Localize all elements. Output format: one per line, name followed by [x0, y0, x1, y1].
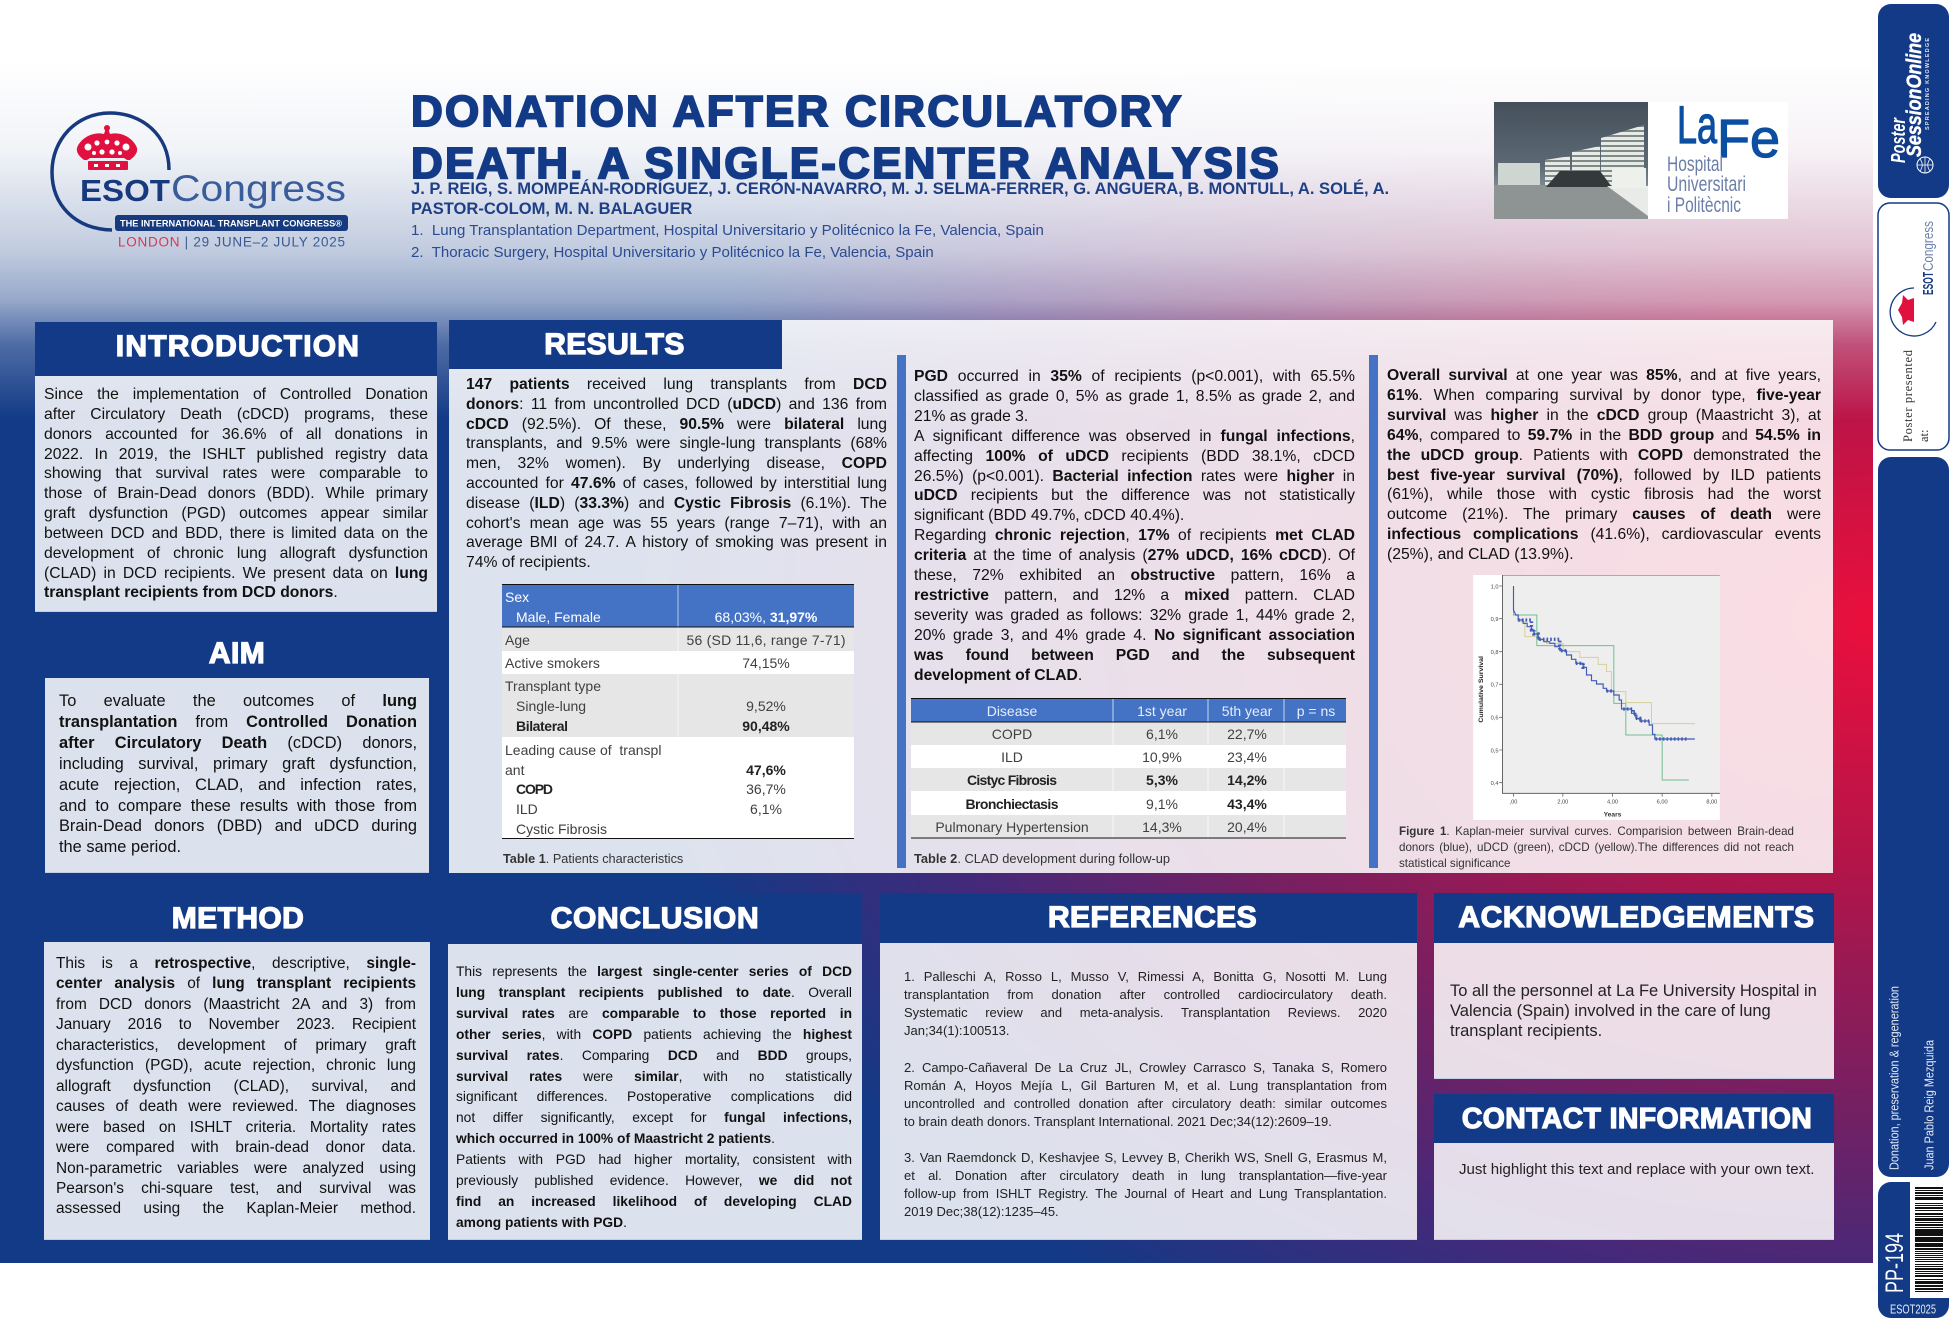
results column 2 text: was found between PGD and the subsequent	[914, 647, 1355, 664]
aim text: the same period.	[59, 838, 181, 856]
table 2 caption: Table 2. CLAD development during follow-up	[914, 851, 1170, 866]
heading: results: RESULTS	[544, 328, 685, 361]
table 1: patient characteristics: Sex	[505, 589, 529, 605]
divider bar right	[1369, 355, 1378, 868]
reference 3	[904, 1150, 1387, 1219]
results column 2 text: PGD occurred in 35% of recipients (p<0.001), with 65.5%	[914, 368, 1355, 385]
table 1: patient characteristics: 56 (SD 11,6, range 7-71)	[686, 632, 846, 648]
results column 2 text: severity was graded as follows: 32% grade 1, 44% grade 2,	[914, 607, 1355, 624]
conclusion text: among patients with PGD.	[456, 1215, 627, 1230]
method text: causes of death were reviewed. The diagnoses	[56, 1098, 416, 1115]
introduction text: 2022. In 2019, the ISHLT published registry data	[44, 446, 428, 463]
table 2: CLAD development	[911, 698, 1346, 838]
introduction text: graft dysfunction (PGD) outcomes appear similar	[44, 505, 428, 522]
method text: were compared with brain-dead donor data.	[56, 1139, 416, 1156]
introduction text: donors accounted for 36.6% of all donations in	[44, 426, 428, 443]
sidebar: poster session tabs	[1877, 4, 1950, 1318]
tab: poster presented at ESOT Congress: Poster presented	[1901, 349, 1915, 442]
table 1: patient characteristics: Male, Female	[516, 609, 601, 625]
tab: poster presented at ESOT Congress: ESOT	[1920, 272, 1937, 295]
results column 3 text: 61%. When comparing survival by donor type, five-year	[1387, 387, 1821, 404]
logo arc	[52, 113, 169, 230]
panel: aim	[45, 637, 429, 873]
title: DONATION AFTER CIRCULATORY	[411, 87, 1184, 136]
method text	[56, 955, 416, 1217]
table 1: patient characteristics: Active smokers	[505, 655, 600, 671]
logo: ESOT Congress: Congress	[171, 168, 346, 209]
table 2: CLAD development: 43,4%	[1227, 796, 1267, 812]
table 1: patient characteristics: 90,48%	[742, 718, 790, 734]
panel: method	[44, 902, 430, 1240]
method text: allograft dysfunction (CLAD), survival, and	[56, 1078, 416, 1095]
tab: poster presented at ESOT Congress	[1878, 203, 1949, 450]
x axis labels: ,00	[1510, 799, 1517, 805]
results column 2 text: development of CLAD.	[914, 667, 1082, 684]
tab: PosterSessionOnline	[1878, 4, 1949, 198]
table 2: CLAD development: 5,3%	[1146, 772, 1179, 788]
table 2: CLAD development: 22,7%	[1227, 726, 1267, 742]
results column 3 text: best five-year survival (70%), followed by ILD patients	[1387, 467, 1821, 484]
panel: conclusion	[448, 893, 862, 1240]
tab: PosterSessionOnline: Poster	[1888, 117, 1910, 163]
heading: aim: AIM	[209, 637, 265, 670]
results column 3 text: 64%, compared to 59.7% in the BDD group and 54.5% in	[1387, 427, 1821, 444]
y axis labels: 1,0	[1491, 584, 1498, 590]
table 1: patient characteristics: Leading cause of transpl	[505, 742, 661, 758]
reference 3: 2019 Dec;38(12):1235–45.	[904, 1204, 1059, 1219]
tab: poster presented at ESOT Congress: at:	[1917, 430, 1931, 442]
table 1: patient characteristics: 74,15%	[742, 655, 790, 671]
aim text: and to compare these results with those from	[59, 797, 417, 815]
reference 1: Systematic review and meta-analysis. Transplantation Reviews. 2020	[904, 1005, 1387, 1020]
introduction text: (CLAD) in DCD recipients. We present data on lung	[44, 565, 428, 582]
introduction text: showing that survival rates were comparable to	[44, 465, 428, 482]
table 1: patient characteristics: 6,1%	[750, 801, 782, 817]
logo location and date: LONDON | 29 JUNE–2 JULY 2025	[118, 234, 345, 250]
title: DEATH. A SINGLE-CENTER ANALYSIS	[411, 139, 1281, 188]
results column 2 text: 21% as grade 3.	[914, 408, 1028, 425]
conclusion text: survival rates were similar, with no statistically	[456, 1069, 852, 1084]
reference 2: to brain death donors. Transplant International. 2021 Dec;34(12):2609–19.	[904, 1114, 1332, 1129]
y axis labels: 0,8	[1491, 650, 1498, 656]
table 1: patient characteristics	[502, 584, 854, 839]
panel: results	[449, 320, 1833, 873]
divider bar left	[897, 355, 906, 868]
reference 2: uncontrolled and controlled donation after circulatory death: similar outcomes	[904, 1096, 1387, 1111]
conclusion text: which occurred in 100% of Maastricht 2 patients.	[456, 1131, 775, 1146]
table 2: CLAD development: 6,1%	[1146, 726, 1178, 742]
table 2: CLAD development: Disease	[987, 703, 1037, 719]
aim text: acute rejection, CLAD, and infection rates,	[59, 776, 417, 794]
affiliations: 2. Thoracic Surgery, Hospital Universitario y Politécnico la Fe, Valencia, Spain	[411, 244, 934, 261]
conclusion text: This represents the largest single-center series of DCD	[456, 964, 852, 979]
results column 3 text: (25%), and CLAD (13.9%).	[1387, 546, 1574, 563]
results column 2 text: 20% grade 3, and 4% grade 4. No significant association	[914, 627, 1355, 644]
results column 2 text: these, 72% exhibited an obstructive pattern, 16% a	[914, 567, 1355, 584]
aim body box	[45, 678, 429, 873]
contact body box	[1434, 1143, 1834, 1240]
La Fe wordmark: Hospital	[1667, 153, 1723, 176]
heading: method: METHOD	[172, 902, 304, 935]
curve: uDCD green	[1514, 586, 1689, 780]
crown	[77, 125, 137, 170]
conclusion text: survival rates. Comparing DCD and BDD groups,	[456, 1048, 852, 1063]
introduction text: those of Brain-Dead donors (BDD). While primary	[44, 485, 428, 502]
conclusion body box	[448, 944, 862, 1240]
table 1: patient characteristics: 9,52%	[746, 698, 786, 714]
table 2: CLAD development: 10,9%	[1142, 749, 1182, 765]
La Fe wordmark: Fe	[1717, 109, 1780, 169]
table 1 caption: Table 1. Patients characteristics	[503, 852, 683, 866]
y axis labels: 0,4	[1491, 781, 1498, 787]
heading: introduction: INTRODUCTION	[116, 330, 360, 363]
results column 2 text: classified as grade 0, 5% as grade 1, 8.5% as grade 2, and A significant difference was observed in fungal infections,	[914, 388, 1355, 445]
reference 1: 1. Palleschi A, Rosso L, Musso V, Rimessi A, Bonitta G, Nosotti M. Lung	[904, 969, 1387, 984]
table 2: CLAD development: COPD	[992, 726, 1032, 742]
method text: center analysis of lung transplant recipients	[56, 975, 416, 992]
figure 1 caption: Figure 1. Kaplan-meier survival curves. Comparision between Brain-dead	[1399, 825, 1794, 838]
results column 1 text: 147 patients received lung transplants from DCD	[466, 376, 887, 393]
aim text: including survival, primary graft dysfunction,	[59, 755, 417, 773]
results column 1 text: donors: 11 from uncontrolled DCD (uDCD) and 136 from	[466, 396, 887, 413]
y axis labels: 0,5	[1491, 748, 1498, 754]
figure 1 caption: statistical significance	[1399, 857, 1510, 870]
y axis labels	[1491, 584, 1498, 787]
results column 2 text: affecting 100% of uDCD recipients (BDD 38.1%, cDCD	[914, 448, 1355, 465]
affiliations	[411, 222, 1044, 261]
table 2: CLAD development: 1st year	[1137, 703, 1187, 719]
tab: poster number and barcode	[1878, 1182, 1950, 1318]
reference 3: follow-up from ISHLT Registry. The Journal of Heart and Lung Transplantation.	[904, 1186, 1387, 1201]
hospital photo	[1494, 102, 1648, 219]
panel: acknowledgements	[1434, 893, 1834, 1079]
table 2: CLAD development: Bronchiectasis	[966, 796, 1059, 812]
aim text: To evaluate the outcomes of lung	[59, 692, 417, 710]
heading: conclusion: CONCLUSION	[551, 902, 759, 935]
heading: results	[449, 320, 782, 369]
results column 3 text: infectious complications (41.6%), cardiovascular events	[1387, 526, 1821, 543]
references body box	[880, 943, 1417, 1240]
introduction text	[44, 386, 428, 601]
table 1: patient characteristics: Age	[505, 632, 530, 648]
results column 2 text: uDCD recipients but the difference was not statistically Regarding chronic rejection, 17% of recipients met CLAD	[914, 487, 1355, 544]
heading: contact information: CONTACT INFORMATION	[1462, 1103, 1812, 1135]
aim text: transplantation from Controlled Donation	[59, 713, 417, 731]
introduction text: transplant recipients from DCD donors.	[44, 584, 338, 601]
method text: characteristics, development of primary graft	[56, 1037, 416, 1054]
table 2: CLAD development: 14,2%	[1227, 772, 1267, 788]
authors: J. P. REIG, S. MOMPEÁN-RODRÍGUEZ, J. CERÓN-NAVARRO, M. J. SELMA-FERRER, G. ANGUERA, B. MONTULL, A. SOLÉ, A.	[411, 179, 1389, 198]
x axis labels	[1510, 799, 1717, 805]
conclusion text: significant differences. Postoperative complications did	[456, 1089, 852, 1104]
x axis title: Years	[1604, 812, 1622, 819]
introduction text: development of chronic lung allograft dysfunction	[44, 545, 428, 562]
results column 1 text: transplants, and 9.5% were single-lung transplants (68%	[466, 435, 887, 452]
conclusion text: survival rates are comparable to those reported in	[456, 1006, 852, 1021]
logo banner: THE INTERNATIONAL TRANSPLANT CONGRESS®	[120, 218, 342, 228]
acknowledgements text	[1450, 982, 1817, 1040]
panel: introduction	[35, 322, 437, 612]
tab: poster presented at ESOT Congress: Congress	[1920, 221, 1937, 271]
logo: La Fe hospital	[1494, 102, 1788, 219]
logo wordmark: ESOT	[80, 173, 170, 208]
panel: contact information	[1434, 1094, 1834, 1240]
results column 3 text: survival was higher in the cDCD group (Maastricht 3), at	[1387, 407, 1821, 424]
affiliations: 1. Lung Transplantation Department, Hospital Universitario y Politécnico la Fe, Valencia, Spain	[411, 222, 1044, 239]
heading: contact information	[1434, 1094, 1834, 1143]
heading: references	[880, 893, 1417, 943]
aim text: after Circulatory Death (cDCD) donors,	[59, 734, 417, 752]
table 1: patient characteristics: ant	[505, 762, 525, 778]
reference 3: 3. Van Raemdonck D, Keshavjee S, Levvey B, Cherikh WS, Snell G, Erasmus M,	[904, 1150, 1387, 1165]
results column 1 text: cohort's mean age was 55 years (range 7–71), with an	[466, 515, 887, 532]
table 1: patient characteristics: COPD	[516, 781, 553, 797]
introduction text: Since the implementation of Controlled Donation	[44, 386, 428, 403]
reference 2	[904, 1060, 1387, 1129]
table 2: CLAD development: p = ns	[1297, 703, 1335, 719]
tab: topic and presenter	[1878, 457, 1949, 1177]
table 2: CLAD development: ILD	[1001, 749, 1023, 765]
acknowledgements text: transplant recipients.	[1450, 1022, 1602, 1040]
acknowledgements text: Valencia (Spain) involved in the care of lung	[1450, 1002, 1771, 1020]
tab: poster number and barcode: PP-194	[1881, 1233, 1909, 1293]
y axis labels: 0,6	[1491, 716, 1498, 722]
method text: January 2016 to November 2023. Recipient	[56, 1016, 416, 1033]
heading: conclusion	[448, 893, 862, 944]
La Fe wordmark: i Politècnic	[1667, 194, 1741, 217]
reference 3: et al. Donation after circulatory death in lung transplantation—five-year	[904, 1168, 1387, 1183]
heading: introduction	[35, 322, 437, 376]
x axis labels: 8,00	[1706, 799, 1717, 805]
y axis title: Cumulative Survival	[1478, 656, 1485, 723]
tab: topic and presenter: Juan Pablo Reig Mezquida	[1922, 1039, 1936, 1170]
method text: from DCD donors (Maastricht 2A and 3) from	[56, 996, 416, 1013]
tab: topic and presenter: Donation, preservation & regeneration	[1886, 986, 1902, 1170]
table 1: patient characteristics: 47,6%	[746, 762, 786, 778]
panel: references	[880, 893, 1417, 1240]
results column 2 text	[914, 368, 1355, 684]
x axis labels: 4,00	[1607, 799, 1618, 805]
results column 3 text: Overall survival at one year was 85%, and at five years,	[1387, 367, 1821, 384]
method text: were based on ISHLT criteria. Mortality rates	[56, 1119, 416, 1136]
results column 1 text: accounted for 47.6% of cases, followed by interstitial lung	[466, 475, 887, 492]
La Fe wordmark: Universitari	[1667, 173, 1746, 196]
aim text: Brain-Dead donors (DBD) and uDCD during	[59, 817, 417, 835]
introduction body box	[35, 376, 437, 612]
results column 1 text: average BMI of 24.7. A history of smoking was present in	[466, 534, 887, 551]
results column 2 text: 26.5%) (p<0.001). Bacterial infection rates were higher in	[914, 468, 1355, 485]
y axis labels: 0,7	[1491, 683, 1498, 689]
heading: references: REFERENCES	[1048, 901, 1257, 934]
x axis labels: 6,00	[1657, 799, 1668, 805]
conclusion text	[456, 964, 852, 1230]
table 2: CLAD development: 5th year	[1222, 703, 1273, 719]
method text: This is a retrospective, descriptive, single-	[56, 955, 416, 972]
results column 3 text: the uDCD group. Patients with COPD demonstrated the	[1387, 447, 1821, 464]
table 2: CLAD development: 20,4%	[1227, 819, 1267, 835]
acknowledgements body box	[1434, 943, 1834, 1079]
results column 1 text	[466, 376, 887, 571]
table 2: CLAD development: 14,3%	[1142, 819, 1182, 835]
table 1: patient characteristics: ILD	[516, 801, 538, 817]
heading: acknowledgements: ACKNOWLEDGEMENTS	[1458, 901, 1815, 934]
method body box	[44, 942, 430, 1240]
table 2: CLAD development: Cistyc Fibrosis	[967, 772, 1057, 788]
title	[411, 87, 1281, 188]
method text: dysfunction (PGD), acute rejection, chronic lung	[56, 1057, 416, 1074]
results column 1 text: disease (ILD) (33.3%) and Cystic Fibrosis (6.1%). The	[466, 495, 887, 512]
table 2: CLAD development: Pulmonary Hypertension	[935, 819, 1089, 835]
heading: acknowledgements	[1434, 893, 1834, 943]
conclusion text: other series, with COPD patients achieving the highest	[456, 1027, 852, 1042]
conclusion text: lung transplant recipients published to date. Overall	[456, 985, 852, 1000]
tab: PosterSessionOnline: SPREADING KNOWLEDGE	[1925, 38, 1931, 130]
table 1: patient characteristics: Cystic Fibrosis	[516, 821, 607, 837]
conclusion text: not differ significantly, except for fungal infections, Patients with PGD had higher mortality, consistent with	[456, 1110, 852, 1167]
figure 1 caption: donors (blue), uDCD (green), cDCD (yellow).The differences did not reach	[1399, 841, 1794, 854]
conclusion text: find an increased likelihood of developing CLAD	[456, 1194, 852, 1209]
table 2: CLAD development: 23,4%	[1227, 749, 1267, 765]
curve: cDCD yellow	[1514, 586, 1695, 724]
results column 2 text: criteria at the time of analysis (27% uDCD, 16% cDCD). Of	[914, 547, 1355, 564]
La Fe wordmark	[1648, 96, 1788, 219]
results column 2 text: restrictive pattern, and 12% a mixed pattern. CLAD	[914, 587, 1355, 604]
table 1: patient characteristics: Transplant type	[505, 678, 601, 694]
logo banner	[115, 215, 348, 231]
conclusion text: previously published evidence. However, we did not	[456, 1173, 852, 1188]
method text: assessed using the Kaplan-Meier method.	[56, 1200, 416, 1217]
acknowledgements text: To all the personnel at La Fe University Hospital in	[1450, 982, 1817, 1000]
results column 3 text	[1387, 367, 1821, 563]
table 2: CLAD development: 9,1%	[1146, 796, 1178, 812]
reference 1: Jan;34(1):100513.	[904, 1023, 1010, 1038]
method text: Pearson's chi-square test, and survival was	[56, 1180, 416, 1197]
introduction text: after Circulatory Death (cDCD) programs, these	[44, 406, 428, 423]
tab: PosterSessionOnline: SessionOnline	[1903, 33, 1926, 157]
introduction text: between DCD and BDD, there is limited data on the	[44, 525, 428, 542]
reference 2: 2. Campo-Cañaveral De La Cruz JL, Crowley Carrasco S, Tanaka S, Romero	[904, 1060, 1387, 1075]
reference 1: transplantation from donation after controlled cardiocirculatory death.	[904, 987, 1387, 1002]
results column 3 text: outcome (21%). The primary causes of death were	[1387, 506, 1821, 523]
results column 1 text: cDCD (92.5%). Of these, 90.5% were bilateral lung	[466, 416, 887, 433]
results column 3 text: (61%), while those with cystic fibrosis had the worst	[1387, 486, 1821, 503]
results column 1 text: men, 32% women). By underlying disease, COPD	[466, 455, 887, 472]
method text: Non-parametric variables were analyzed using	[56, 1160, 416, 1177]
reference 2: Román A, Hoyos Mejía L, Gil Barturen M, et al. Lung transplantation from	[904, 1078, 1387, 1093]
logo: ESOT Congress	[50, 111, 348, 250]
table 1: patient characteristics: Bilateral	[516, 718, 568, 734]
table 1: patient characteristics: 68,03%, 31,97%	[715, 609, 818, 625]
table 1: patient characteristics: 36,7%	[746, 781, 786, 797]
results column 1 text: 74% of recipients.	[466, 554, 591, 571]
aim text	[59, 692, 417, 856]
results column 2 text: significant (BDD 49.7%, cDCD 40.4%).	[914, 507, 1184, 524]
reference 1	[904, 969, 1387, 1038]
tab: poster number and barcode: ESOT2025	[1890, 1302, 1936, 1316]
figure 1 caption	[1399, 825, 1794, 870]
curve: BDD blue	[1514, 586, 1695, 739]
y axis labels: 0,9	[1491, 617, 1498, 623]
x axis labels: 2,00	[1557, 799, 1568, 805]
table 1: patient characteristics: Single-lung	[516, 698, 586, 714]
contact text: Just highlight this text and replace with your own text.	[1459, 1161, 1814, 1178]
authors	[411, 179, 1389, 218]
authors: PASTOR-COLOM, M. N. BALAGUER	[411, 199, 692, 218]
chart: Kaplan-Meier survival curves	[1473, 575, 1720, 820]
